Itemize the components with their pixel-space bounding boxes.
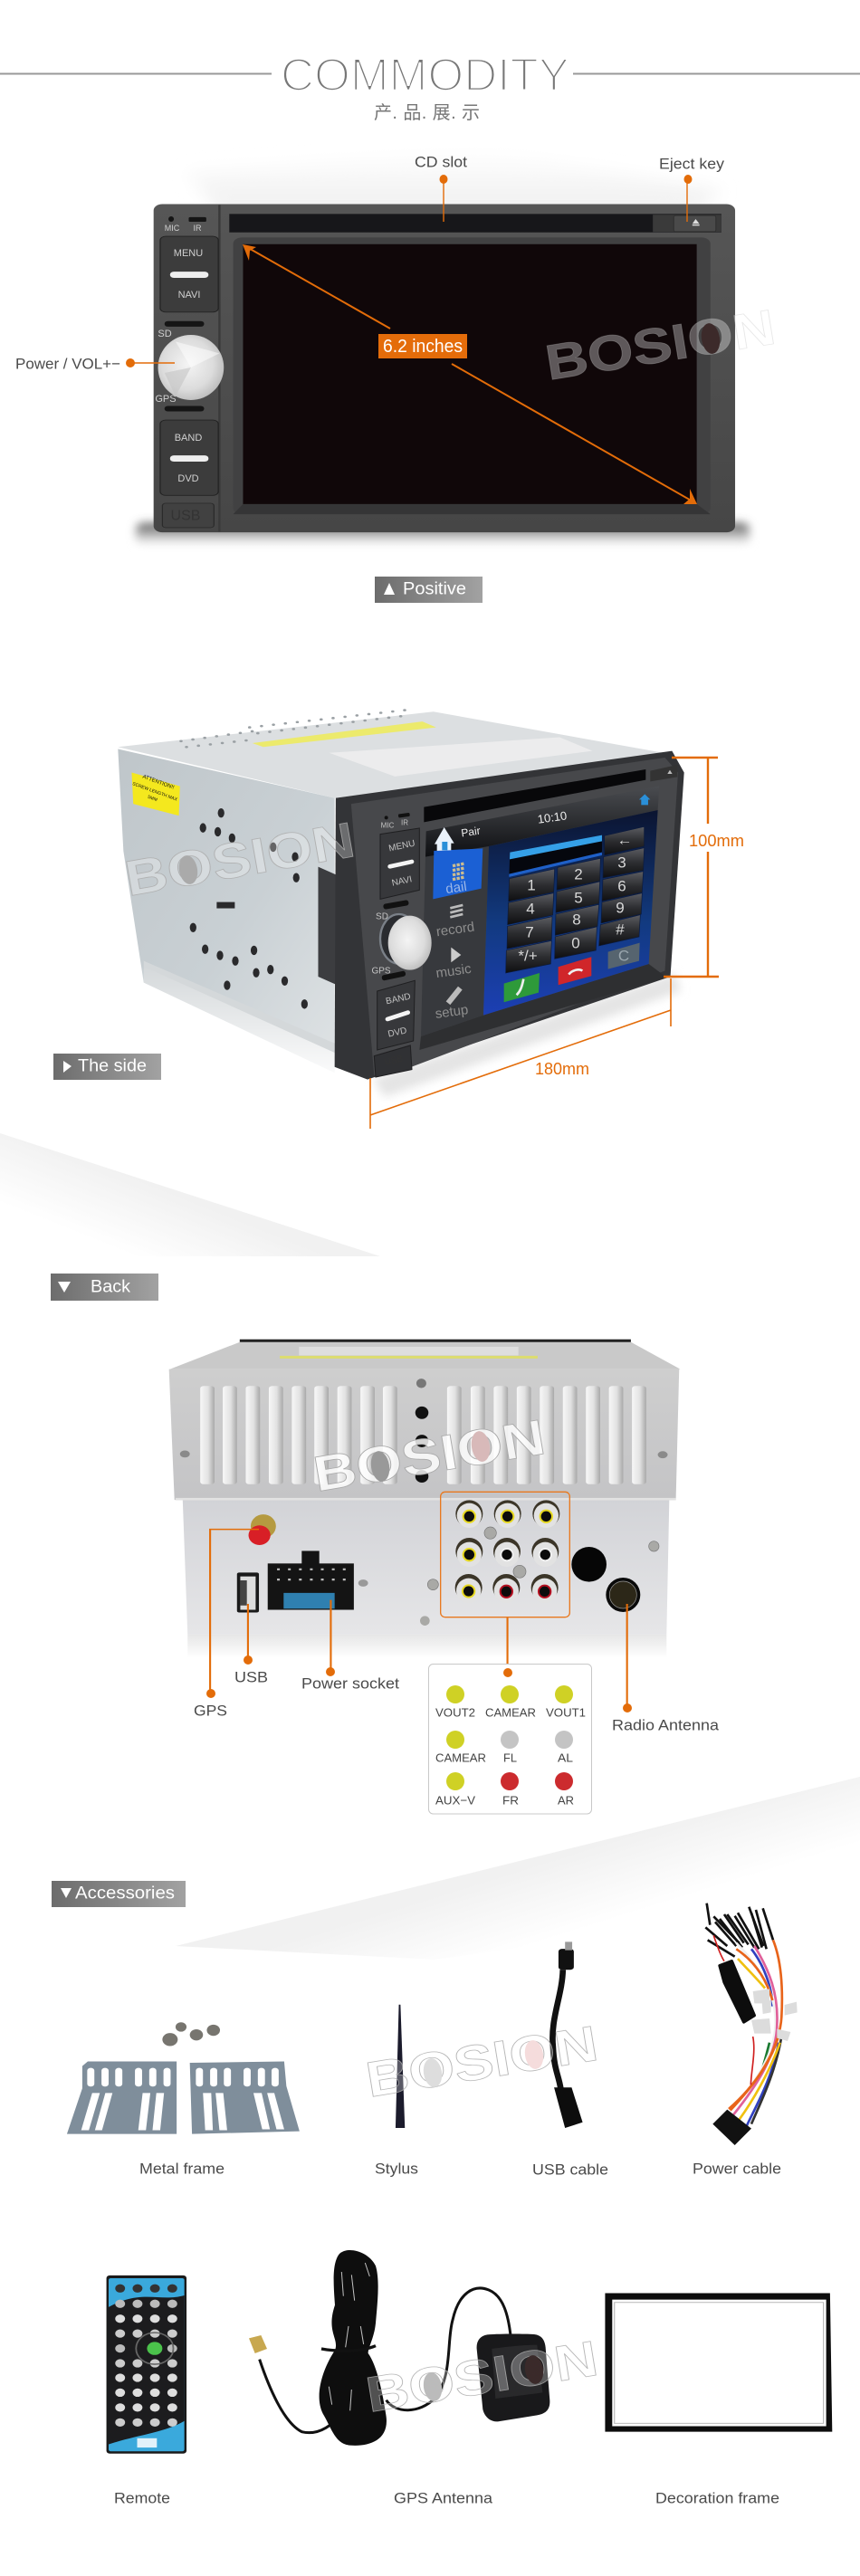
tag: Accessories: Accessories: [75, 1884, 175, 1903]
side view text: ATTENTION!!: [141, 775, 175, 791]
side view text: DVD: [387, 1026, 407, 1040]
left menu: [421, 846, 489, 1036]
device button labels: GPS: [155, 394, 177, 405]
dimension: 180mm width: [370, 978, 671, 1129]
side view text: C: [618, 947, 629, 965]
panel: RCA legend: FR: [502, 1794, 519, 1807]
side view text: 8: [572, 911, 581, 929]
setup icon: [448, 988, 460, 1003]
device button labels: MIC: [165, 224, 180, 233]
tag: Accessories: [52, 1881, 186, 1907]
black plug: [571, 1547, 607, 1582]
small home icon: [639, 794, 650, 805]
keypad background: [483, 810, 658, 1016]
power socket: [268, 1550, 354, 1610]
screen lower bezel: [419, 964, 667, 1050]
sd and gps slots: [165, 216, 206, 412]
power volume knob: [158, 335, 224, 400]
panel: RCA legend: VOUT2: [435, 1705, 475, 1720]
panel: side view device body: [118, 710, 684, 1086]
device button labels: IR: [194, 224, 202, 233]
tag: The side: The side: [78, 1057, 147, 1075]
side view text: record: [435, 920, 475, 940]
label: Metal frame: Metal frame: [139, 2160, 225, 2178]
side view text: dail: [444, 879, 468, 897]
panel holes: [416, 1379, 428, 1483]
top edge: [240, 1340, 631, 1342]
side view text: [129, 772, 633, 1068]
device button labels: USB: [171, 509, 200, 523]
CD slot: [424, 769, 645, 822]
menu navi button: [160, 236, 218, 312]
callout: Eject key: [659, 156, 725, 222]
keypad keys: [506, 826, 645, 973]
CD slot bar: [229, 214, 721, 233]
arrow: 6.2 inch screen diagonal: [243, 244, 697, 504]
dimension: 180mm width: 180mm: [535, 1060, 589, 1078]
lower panel: [183, 1500, 669, 1635]
tag: Positive: [375, 577, 483, 603]
side view text: 4: [526, 900, 535, 918]
subtitle: Chinese product display heading: 产. 品. 展. 示: [374, 102, 480, 123]
screen: [243, 244, 697, 504]
panel: RCA legend: [429, 1664, 592, 1814]
record icon: [450, 905, 463, 917]
callout: USB: [234, 1655, 268, 1685]
decorative band: left diagonal: [0, 1133, 380, 1256]
decorative band: right diagonal: [176, 1777, 860, 1960]
callout: CD slot: CD slot: [415, 154, 467, 170]
side view text: 2: [574, 865, 583, 883]
panel: positive view device shadow: [136, 523, 750, 545]
mounting holes: [190, 808, 308, 1009]
callout: Radio Antenna: Radio Antenna: [612, 1716, 720, 1734]
side view text: 9: [616, 900, 625, 916]
dimension: 100mm height: [664, 758, 744, 977]
watermark: side view: BOSION: [120, 811, 358, 907]
panel: back view device: [169, 1340, 680, 1658]
side view text: IR: [401, 818, 408, 827]
watermark: accessories GPS antenna: BOSION: [362, 2330, 602, 2423]
panel: RCA legend: VOUT1: [546, 1705, 586, 1720]
screen bezel: [234, 237, 711, 514]
radio antenna port: [606, 1578, 640, 1612]
panel: accessories: [67, 1942, 832, 2454]
top face: [118, 711, 674, 798]
top bar: [425, 786, 659, 857]
callout: GPS: [194, 1689, 227, 1720]
icon: metal frame: [67, 2061, 300, 2134]
panel: RCA legend: CAMEAR: [435, 1751, 486, 1765]
side view text: 3: [617, 854, 626, 871]
top face: [170, 1342, 680, 1369]
panel: RCA legend: AUX−V: [435, 1794, 475, 1807]
side view text: 5: [574, 889, 583, 907]
side view text: */+: [518, 947, 538, 965]
rear panel: [169, 1369, 679, 1500]
front frame: [335, 751, 684, 1080]
device button labels: [155, 224, 203, 523]
side sticker: [131, 772, 180, 816]
side view text: SD: [376, 912, 388, 921]
leader lines: [210, 1530, 627, 1708]
panel: RCA legend: AR: [558, 1794, 574, 1807]
device button labels: NAVI: [178, 290, 200, 301]
watermark: back view: BOSION: [310, 1408, 549, 1503]
panel: side view touch screen: [374, 765, 677, 1077]
label: Power cable: Power cable: [693, 2160, 781, 2178]
side view text: 0: [571, 934, 580, 952]
callout: Power / VOL: [15, 355, 175, 373]
eject key: [674, 215, 716, 232]
panel: RCA legend: CAMEAR: [485, 1705, 536, 1720]
GPS connector: [249, 1514, 276, 1545]
side view text: MENU: [387, 839, 416, 854]
dial grid icon: [453, 863, 464, 880]
call buttons: [504, 973, 540, 1002]
side view text: 1: [527, 876, 536, 894]
dimension: 100mm height: 100mm: [689, 832, 744, 850]
dial tile: [433, 848, 483, 899]
side view text: SCREW LENGTH MAX: [131, 781, 178, 803]
panel: positive view glow: [186, 150, 724, 210]
RCA jacks and rear ports: [420, 1492, 659, 1626]
label: Decoration frame: Decoration frame: [655, 2489, 779, 2507]
icon: remote: [107, 2275, 186, 2454]
callout: 6.2 inches: 6.2 inches: [383, 337, 463, 357]
side view text: 6: [617, 878, 626, 894]
eject: [650, 765, 677, 781]
side view text: setup: [435, 1002, 469, 1022]
tag: Back: [51, 1274, 158, 1301]
RCA highlight frame: [441, 1492, 569, 1617]
home icon: [435, 827, 454, 851]
knob: [380, 914, 417, 964]
side view text: BAND: [385, 992, 412, 1007]
tag: Back: Back: [91, 1278, 131, 1296]
callout: USB: USB: [234, 1669, 268, 1685]
side bracket: [318, 867, 336, 985]
icon: power cable: [705, 1903, 798, 2145]
icon: stylus: [396, 2005, 405, 2128]
icon: USB cable: [552, 1942, 583, 2128]
side view text: #: [616, 921, 625, 938]
callout: Radio Antenna: [612, 1703, 720, 1734]
band dvd button: [160, 420, 218, 495]
panel: RCA legend: AL: [558, 1751, 573, 1765]
callout: Eject key: Eject key: [659, 156, 725, 172]
side view text: MIC: [381, 822, 395, 829]
watermark: positive view: BOSION: [541, 299, 779, 391]
side view text: 10:10: [537, 808, 568, 826]
callout: Power socket: Power socket: [301, 1674, 399, 1693]
device button labels: BAND: [175, 433, 202, 444]
tag: The side: [53, 1054, 161, 1080]
device button labels: MENU: [174, 248, 203, 259]
icon: decoration frame: [605, 2293, 832, 2432]
label: USB cable: USB cable: [532, 2161, 608, 2178]
icon: screws: [162, 2022, 220, 2046]
label: Stylus: Stylus: [375, 2160, 418, 2178]
watermark: positive view: BOSION: [541, 299, 779, 391]
device button labels: DVD: [177, 473, 199, 484]
callout: Power socket: [301, 1667, 399, 1693]
label: GPS Antenna: GPS Antenna: [394, 2489, 493, 2507]
callout: GPS: GPS: [194, 1702, 227, 1720]
side view text: music: [435, 961, 473, 981]
side view text: ←: [617, 831, 632, 849]
panel: positive view device: [154, 205, 735, 532]
watermark: accessories stylus and USB cable: BOSION: [362, 2015, 602, 2108]
tag: Positive: Positive: [403, 579, 466, 599]
shadow under side view: [373, 973, 681, 1097]
callout: Power / VOL: Power / VOL+−: [15, 355, 120, 373]
callout: CD slot: [415, 154, 467, 222]
title: COMMODITY heading: COMMODITY: [281, 49, 569, 100]
side view text: GPS: [371, 967, 391, 976]
side face: [118, 749, 335, 1073]
side view text: Pair: [460, 825, 482, 839]
side view text: USB: [384, 1054, 405, 1068]
icon: GPS antenna: [249, 2250, 549, 2446]
usb cover: [162, 503, 214, 528]
music play icon: [451, 948, 461, 962]
side view text: NAVI: [391, 874, 413, 889]
mic and ir: [381, 813, 410, 981]
side view text: 5MM: [147, 795, 158, 803]
device button labels: SD: [158, 329, 172, 339]
USB port: [237, 1572, 259, 1613]
reflection: [187, 1635, 666, 1658]
side menu buttons: [380, 828, 419, 899]
panel: RCA legend: FL: [503, 1751, 517, 1765]
cooling fins: [200, 1386, 646, 1484]
display: [509, 835, 602, 877]
label: Remote: Remote: [114, 2489, 170, 2507]
screws: [427, 1527, 659, 1590]
side view text: 7: [525, 923, 534, 941]
